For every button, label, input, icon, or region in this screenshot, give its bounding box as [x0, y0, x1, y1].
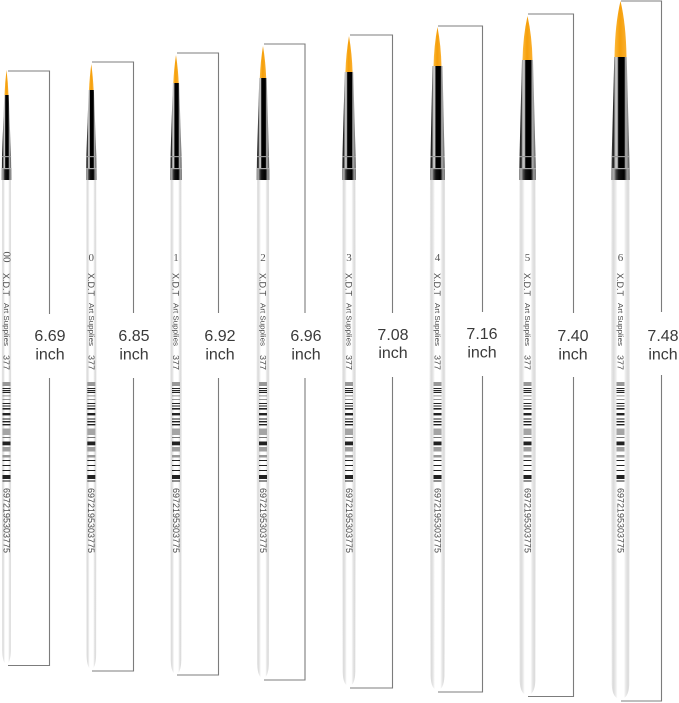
- label 6.96 inch: [290, 328, 322, 364]
- brush 5: [519, 16, 536, 695]
- barcode digits: 6972195303775: [258, 488, 268, 553]
- size number: 3: [346, 252, 352, 264]
- ferrule: [2, 95, 11, 180]
- bristles: [434, 27, 442, 67]
- ferrule band: [519, 156, 536, 180]
- ferrule: [611, 57, 630, 180]
- bracket 6.92: [177, 53, 218, 675]
- barcode digits: 6972195303775: [615, 488, 625, 553]
- label 6.92 inch: 6.92: [204, 328, 236, 345]
- size number: 0: [89, 252, 95, 264]
- brush 3: [342, 36, 356, 686]
- ferrule band: [430, 156, 445, 180]
- label 6.92 inch: [204, 328, 236, 364]
- model number: 377: [344, 355, 354, 370]
- ferrule band: [86, 156, 97, 180]
- bristles: [614, 1, 626, 57]
- handle: [430, 180, 446, 690]
- label 6.96 inch: inch: [291, 346, 321, 364]
- label 6.69 inch: inch: [35, 346, 65, 364]
- art supplies text: Art Supplies: [172, 303, 180, 346]
- handle: [86, 180, 97, 669]
- ferrule: [257, 78, 269, 180]
- bracket 6.69: [8, 71, 50, 666]
- brand text: X.D.T: [342, 273, 354, 296]
- bracket 7.48: [621, 1, 662, 701]
- barcode: [259, 382, 267, 482]
- ferrule band: [611, 156, 630, 180]
- barcode: [2, 382, 10, 482]
- barcode: [434, 382, 442, 482]
- model number: 377: [2, 355, 12, 370]
- label 7.08 inch: [377, 327, 409, 362]
- handle: [256, 180, 270, 678]
- label 7.40 inch: inch: [558, 346, 588, 364]
- model number: 377: [432, 355, 442, 370]
- barcode digits: 6972195303775: [86, 488, 96, 553]
- brand text: X.D.T: [0, 273, 11, 296]
- bristles: [522, 16, 532, 60]
- barcode digits: 6972195303775: [432, 488, 442, 553]
- art supplies text: Art Supplies: [87, 303, 96, 346]
- label 7.16 inch: 7.16: [466, 326, 498, 343]
- barcode digits: 6972195303775: [1, 488, 11, 553]
- barcode digits: 6972195303775: [171, 488, 181, 553]
- size number: 4: [435, 252, 441, 264]
- ferrule band: [170, 156, 182, 180]
- label 6.69 inch: 6.69: [34, 328, 66, 345]
- barcode digits: 6972195303775: [522, 488, 532, 553]
- size number: 00: [0, 252, 12, 263]
- label 6.85 inch: inch: [119, 346, 149, 364]
- ferrule: [342, 72, 356, 180]
- size number: 2: [260, 252, 266, 264]
- brand text: X.D.T: [256, 273, 268, 296]
- handle: [2, 180, 11, 664]
- bracket 6.96: [264, 44, 305, 680]
- bracket 6.85: [92, 62, 134, 671]
- label 6.96 inch: 6.96: [290, 328, 322, 345]
- barcode: [616, 382, 624, 482]
- handle: [170, 180, 182, 674]
- barcode: [345, 382, 353, 482]
- barcode digits: 6972195303775: [344, 488, 354, 553]
- brush 1: [170, 55, 182, 674]
- label 7.08 inch: inch: [378, 345, 408, 362]
- ferrule: [170, 83, 182, 180]
- barcode: [524, 382, 532, 482]
- label 6.69 inch: [34, 328, 66, 364]
- bristles: [260, 46, 266, 78]
- art supplies text: Art Supplies: [258, 303, 268, 346]
- size number: 6: [618, 252, 624, 264]
- ferrule: [430, 66, 445, 180]
- barcode: [172, 382, 180, 482]
- label 7.16 inch: inch: [467, 344, 497, 362]
- ferrule band: [257, 156, 269, 180]
- bristles: [89, 64, 94, 90]
- label 6.85 inch: [118, 328, 150, 364]
- brand text: X.D.T: [85, 273, 96, 296]
- label 7.48 inch: inch: [648, 346, 678, 364]
- brush 4: [430, 27, 446, 690]
- bracket 7.08: [350, 35, 392, 688]
- bristles: [345, 36, 353, 72]
- label 7.48 inch: 7.48: [647, 328, 679, 345]
- label 7.40 inch: [557, 328, 589, 364]
- label 7.08 inch: 7.08: [377, 327, 409, 344]
- handle: [611, 180, 630, 699]
- brush 0: [85, 64, 97, 669]
- label 7.48 inch: [647, 328, 679, 364]
- brand text: X.D.T: [170, 273, 180, 296]
- brand text: X.D.T: [431, 273, 442, 296]
- bristles: [173, 55, 179, 83]
- label 6.85 inch: 6.85: [118, 328, 150, 345]
- art supplies text: Art Supplies: [523, 303, 532, 346]
- art supplies text: Art Supplies: [344, 303, 354, 346]
- model number: 377: [522, 355, 532, 370]
- size number: 5: [525, 252, 531, 264]
- model number: 377: [171, 355, 181, 370]
- model number: 377: [258, 355, 268, 370]
- label 7.40 inch: 7.40: [557, 328, 589, 345]
- bracket 7.40: [528, 14, 574, 696]
- brush 2: [256, 46, 270, 678]
- brush 00: [0, 70, 12, 664]
- ferrule band: [342, 156, 356, 180]
- ferrule band: [2, 156, 11, 180]
- barcode: [87, 382, 95, 482]
- art supplies text: Art Supplies: [433, 303, 442, 346]
- handle: [519, 180, 536, 695]
- model number: 377: [616, 355, 626, 370]
- size number: 1: [173, 252, 179, 264]
- label 6.92 inch: inch: [205, 346, 235, 364]
- brand text: X.D.T: [521, 273, 532, 296]
- brush 6: [611, 1, 630, 699]
- art supplies text: Art Supplies: [616, 303, 625, 346]
- brand text: X.D.T: [614, 273, 625, 296]
- ferrule: [519, 60, 536, 180]
- label 7.16 inch: [466, 326, 498, 362]
- handle: [342, 180, 356, 686]
- art supplies text: Art Supplies: [2, 303, 11, 346]
- bracket 7.16: [438, 26, 482, 692]
- model number: 377: [86, 355, 96, 370]
- ferrule: [86, 90, 97, 180]
- bristles: [4, 70, 8, 95]
